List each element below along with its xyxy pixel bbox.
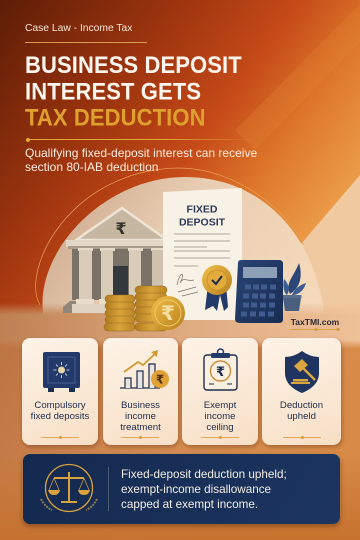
TaxTMI logo: TaxTMI.com <box>291 317 340 327</box>
gold coin stacks <box>104 286 167 331</box>
fixed deposit document: DEPOSIT <box>179 216 226 228</box>
banner text <box>121 468 287 511</box>
icon: safe <box>43 352 80 392</box>
label: income <box>205 410 235 422</box>
label: upheld <box>287 410 316 422</box>
hero dome backdrop <box>43 177 324 340</box>
title <box>25 50 242 131</box>
label: treatment <box>120 422 161 432</box>
icon: clipboard with rupee: ₹ <box>216 365 225 380</box>
subtitle: Qualifying fixed-deposit interest can receive <box>25 146 257 160</box>
fixed deposit document <box>163 188 242 320</box>
award rosette <box>202 265 232 311</box>
fixed deposit document: FIXED <box>187 204 218 216</box>
card: exempt income ceiling <box>182 338 258 445</box>
accent <box>41 437 79 438</box>
label: income <box>125 410 156 422</box>
label <box>280 400 323 422</box>
icon: clipboard with rupee <box>203 348 238 391</box>
rupee coin <box>151 296 185 330</box>
label: ceiling <box>206 422 234 432</box>
label: Compulsory <box>34 400 86 410</box>
label: Business <box>121 400 160 410</box>
banner text: Fixed-deposit deduction upheld; <box>121 468 287 481</box>
category label: Case Law - Income Tax <box>25 23 132 34</box>
card: compulsory fixed deposits <box>22 338 98 445</box>
icon: scales of justice <box>40 464 98 512</box>
header rule <box>25 42 147 43</box>
label <box>120 400 161 432</box>
bank building icon: ₹ <box>115 219 127 238</box>
banner divider <box>108 467 109 511</box>
accent <box>201 437 239 438</box>
card: deduction upheld <box>262 338 341 445</box>
title: INTEREST GETS <box>25 77 201 104</box>
banner text: capped at exempt income. <box>121 498 258 511</box>
card: business income treatment <box>103 338 178 445</box>
subtitle <box>25 146 257 174</box>
subtitle: section 80-IAB deduction <box>25 160 158 174</box>
bank building icon <box>63 208 168 313</box>
label: Exempt <box>204 400 236 410</box>
label: Deduction <box>280 400 323 410</box>
rupee coin: ₹ <box>161 301 175 325</box>
title: TAX DEDUCTION <box>25 103 206 131</box>
TaxTMI logo <box>290 317 340 331</box>
icon: growth chart with rupee <box>120 350 169 389</box>
title: BUSINESS DEPOSIT <box>25 50 242 78</box>
potted plant <box>282 263 306 311</box>
label: fixed deposits <box>31 410 89 422</box>
icon: shield with gavel <box>285 351 319 393</box>
title divider <box>26 138 256 142</box>
conclusion banner <box>23 454 340 524</box>
accent <box>121 437 159 438</box>
label <box>30 400 89 422</box>
label <box>204 400 236 432</box>
banner text: exempt-income disallowance <box>121 483 271 496</box>
accent <box>283 437 321 438</box>
icon: growth chart with rupee: ₹ <box>156 372 164 386</box>
calculator <box>235 260 283 323</box>
